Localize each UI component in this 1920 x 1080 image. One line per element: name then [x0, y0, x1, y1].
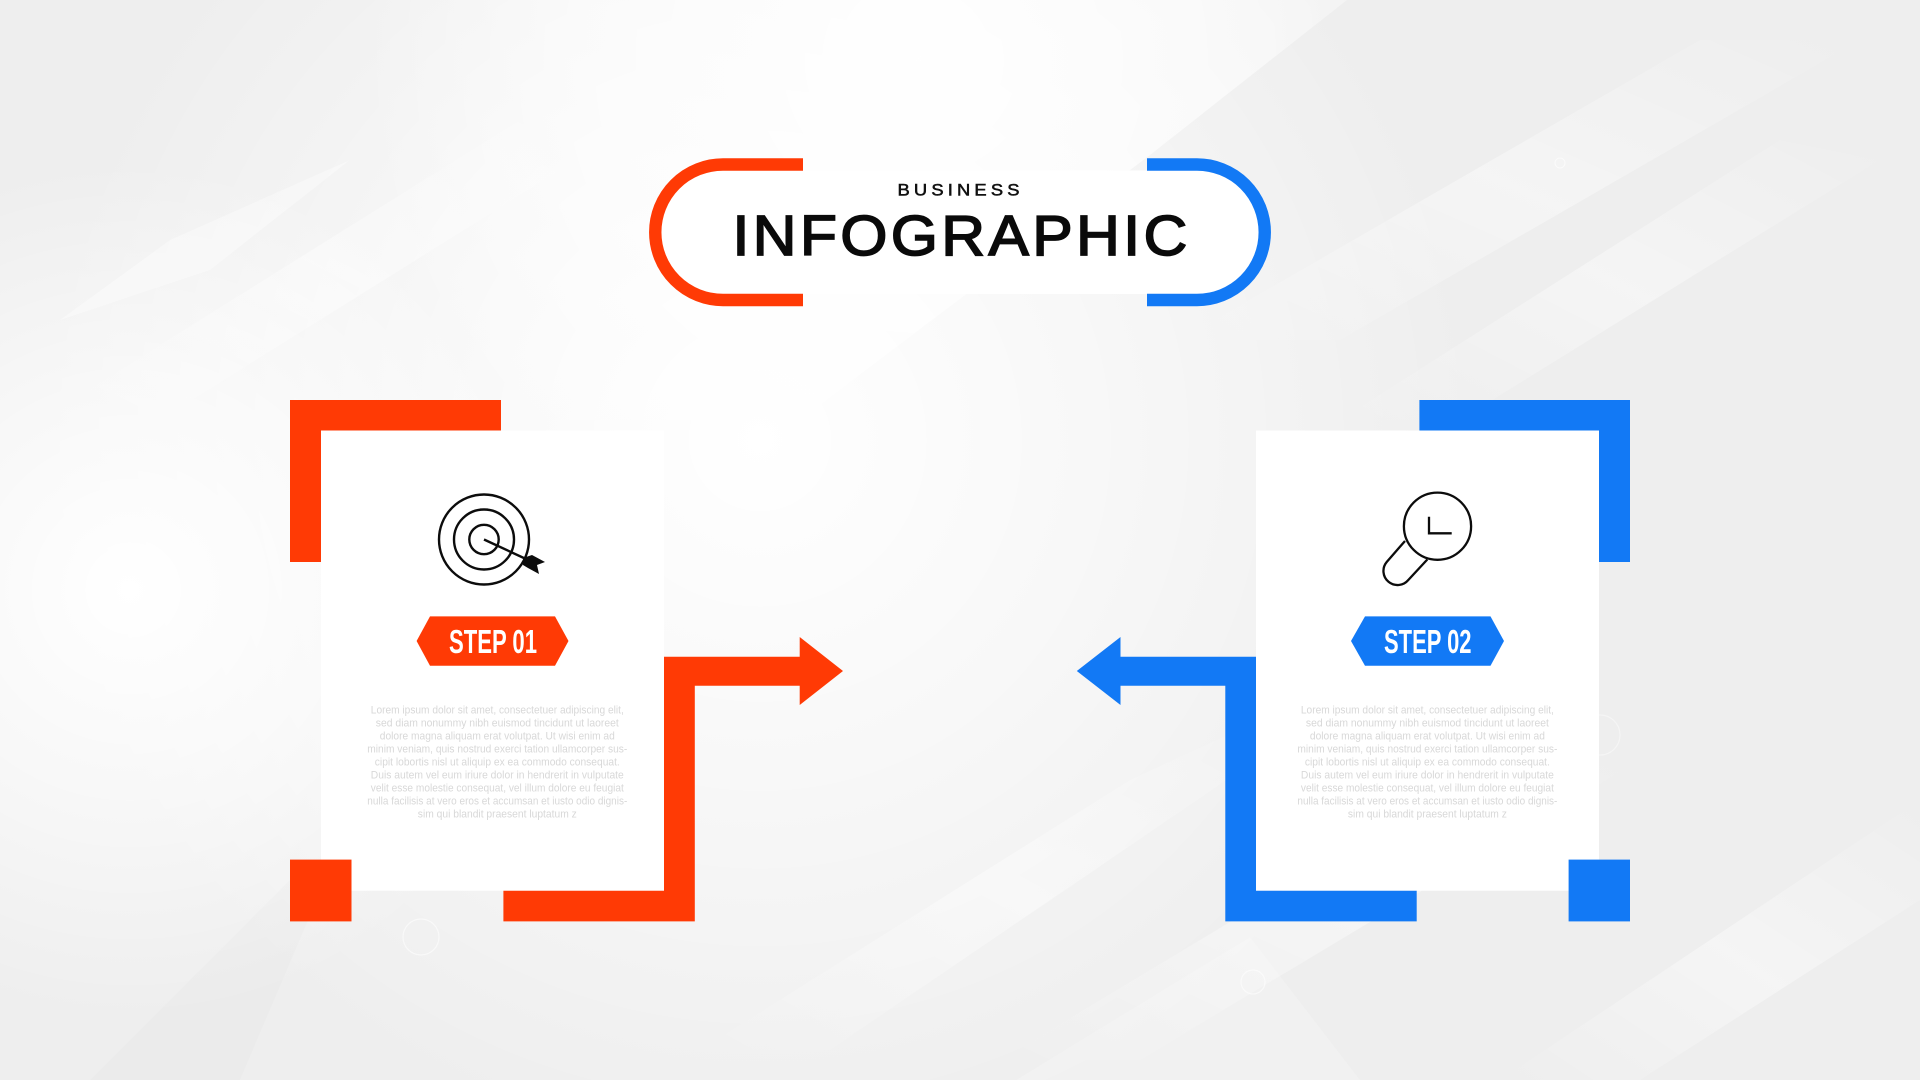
step 02 label: STEP 02	[1384, 623, 1472, 660]
heading: INFOGRAPHIC: INFOGRAPHIC	[732, 205, 1187, 268]
body text: sim qui blandit praesent luptatum z	[418, 808, 577, 820]
title pill background	[660, 170, 1260, 294]
white card	[1256, 430, 1599, 891]
blue right bracket	[1147, 164, 1265, 300]
step 01 label: STEP 01	[449, 623, 537, 660]
step 01 label	[417, 616, 568, 666]
step 02 label	[1351, 616, 1504, 666]
body text: sed diam nonummy nibh euismod tincidunt ut laoreet	[376, 718, 620, 730]
body text: sed diam nonummy nibh euismod tincidunt ut laoreet	[1306, 718, 1550, 730]
red corner square	[290, 860, 352, 921]
red top-left corner bracket	[290, 400, 501, 562]
icon: target with arrow	[439, 494, 545, 584]
body text: dolore magna aliquam erat volutpat. Ut wisi enim ad	[380, 730, 615, 742]
body text: Lorem ipsum dolor sit amet, consectetuer adipiscing elit,	[1301, 704, 1554, 716]
body text: minim veniam, quis nostrud exerci tation ullamcorper sus-	[1297, 744, 1558, 756]
blue corner square	[1569, 860, 1630, 921]
body text	[367, 704, 628, 820]
icon: magnifier with clock	[1383, 493, 1471, 585]
red connector arrow pointing right	[503, 637, 843, 921]
body text: velit esse molestie consequat, vel illum dolore eu feugiat	[371, 782, 625, 794]
body text: Duis autem vel eum iriure dolor in hendrerit in vulputate	[1301, 770, 1554, 782]
subtitle: BUSINESS: BUSINESS	[898, 180, 1020, 200]
body text: minim veniam, quis nostrud exerci tation ullamcorper sus-	[367, 744, 628, 756]
body text: Duis autem vel eum iriure dolor in hendrerit in vulputate	[371, 770, 624, 782]
body text	[1297, 704, 1558, 820]
blue connector arrow pointing left	[1077, 637, 1417, 921]
body text: nulla facilisis at vero eros et accumsan et iusto odio dignis-	[1297, 796, 1558, 808]
body text: dolore magna aliquam erat volutpat. Ut wisi enim ad	[1310, 730, 1545, 742]
body text: sim qui blandit praesent luptatum z	[1348, 808, 1507, 820]
blue top-right corner bracket	[1419, 400, 1630, 562]
white card	[321, 430, 664, 891]
panel: step 01	[290, 400, 843, 921]
panel: step 02	[1077, 400, 1630, 921]
body text: cipit lobortis nisl ut aliquip ex ea commodo consequat.	[375, 756, 620, 768]
body text: velit esse molestie consequat, vel illum dolore eu feugiat	[1301, 782, 1555, 794]
red left bracket	[655, 164, 803, 300]
body text: cipit lobortis nisl ut aliquip ex ea commodo consequat.	[1305, 756, 1550, 768]
body text: Lorem ipsum dolor sit amet, consectetuer adipiscing elit,	[371, 704, 624, 716]
body text: nulla facilisis at vero eros et accumsan et iusto odio dignis-	[367, 796, 627, 808]
title badge	[655, 164, 1265, 300]
